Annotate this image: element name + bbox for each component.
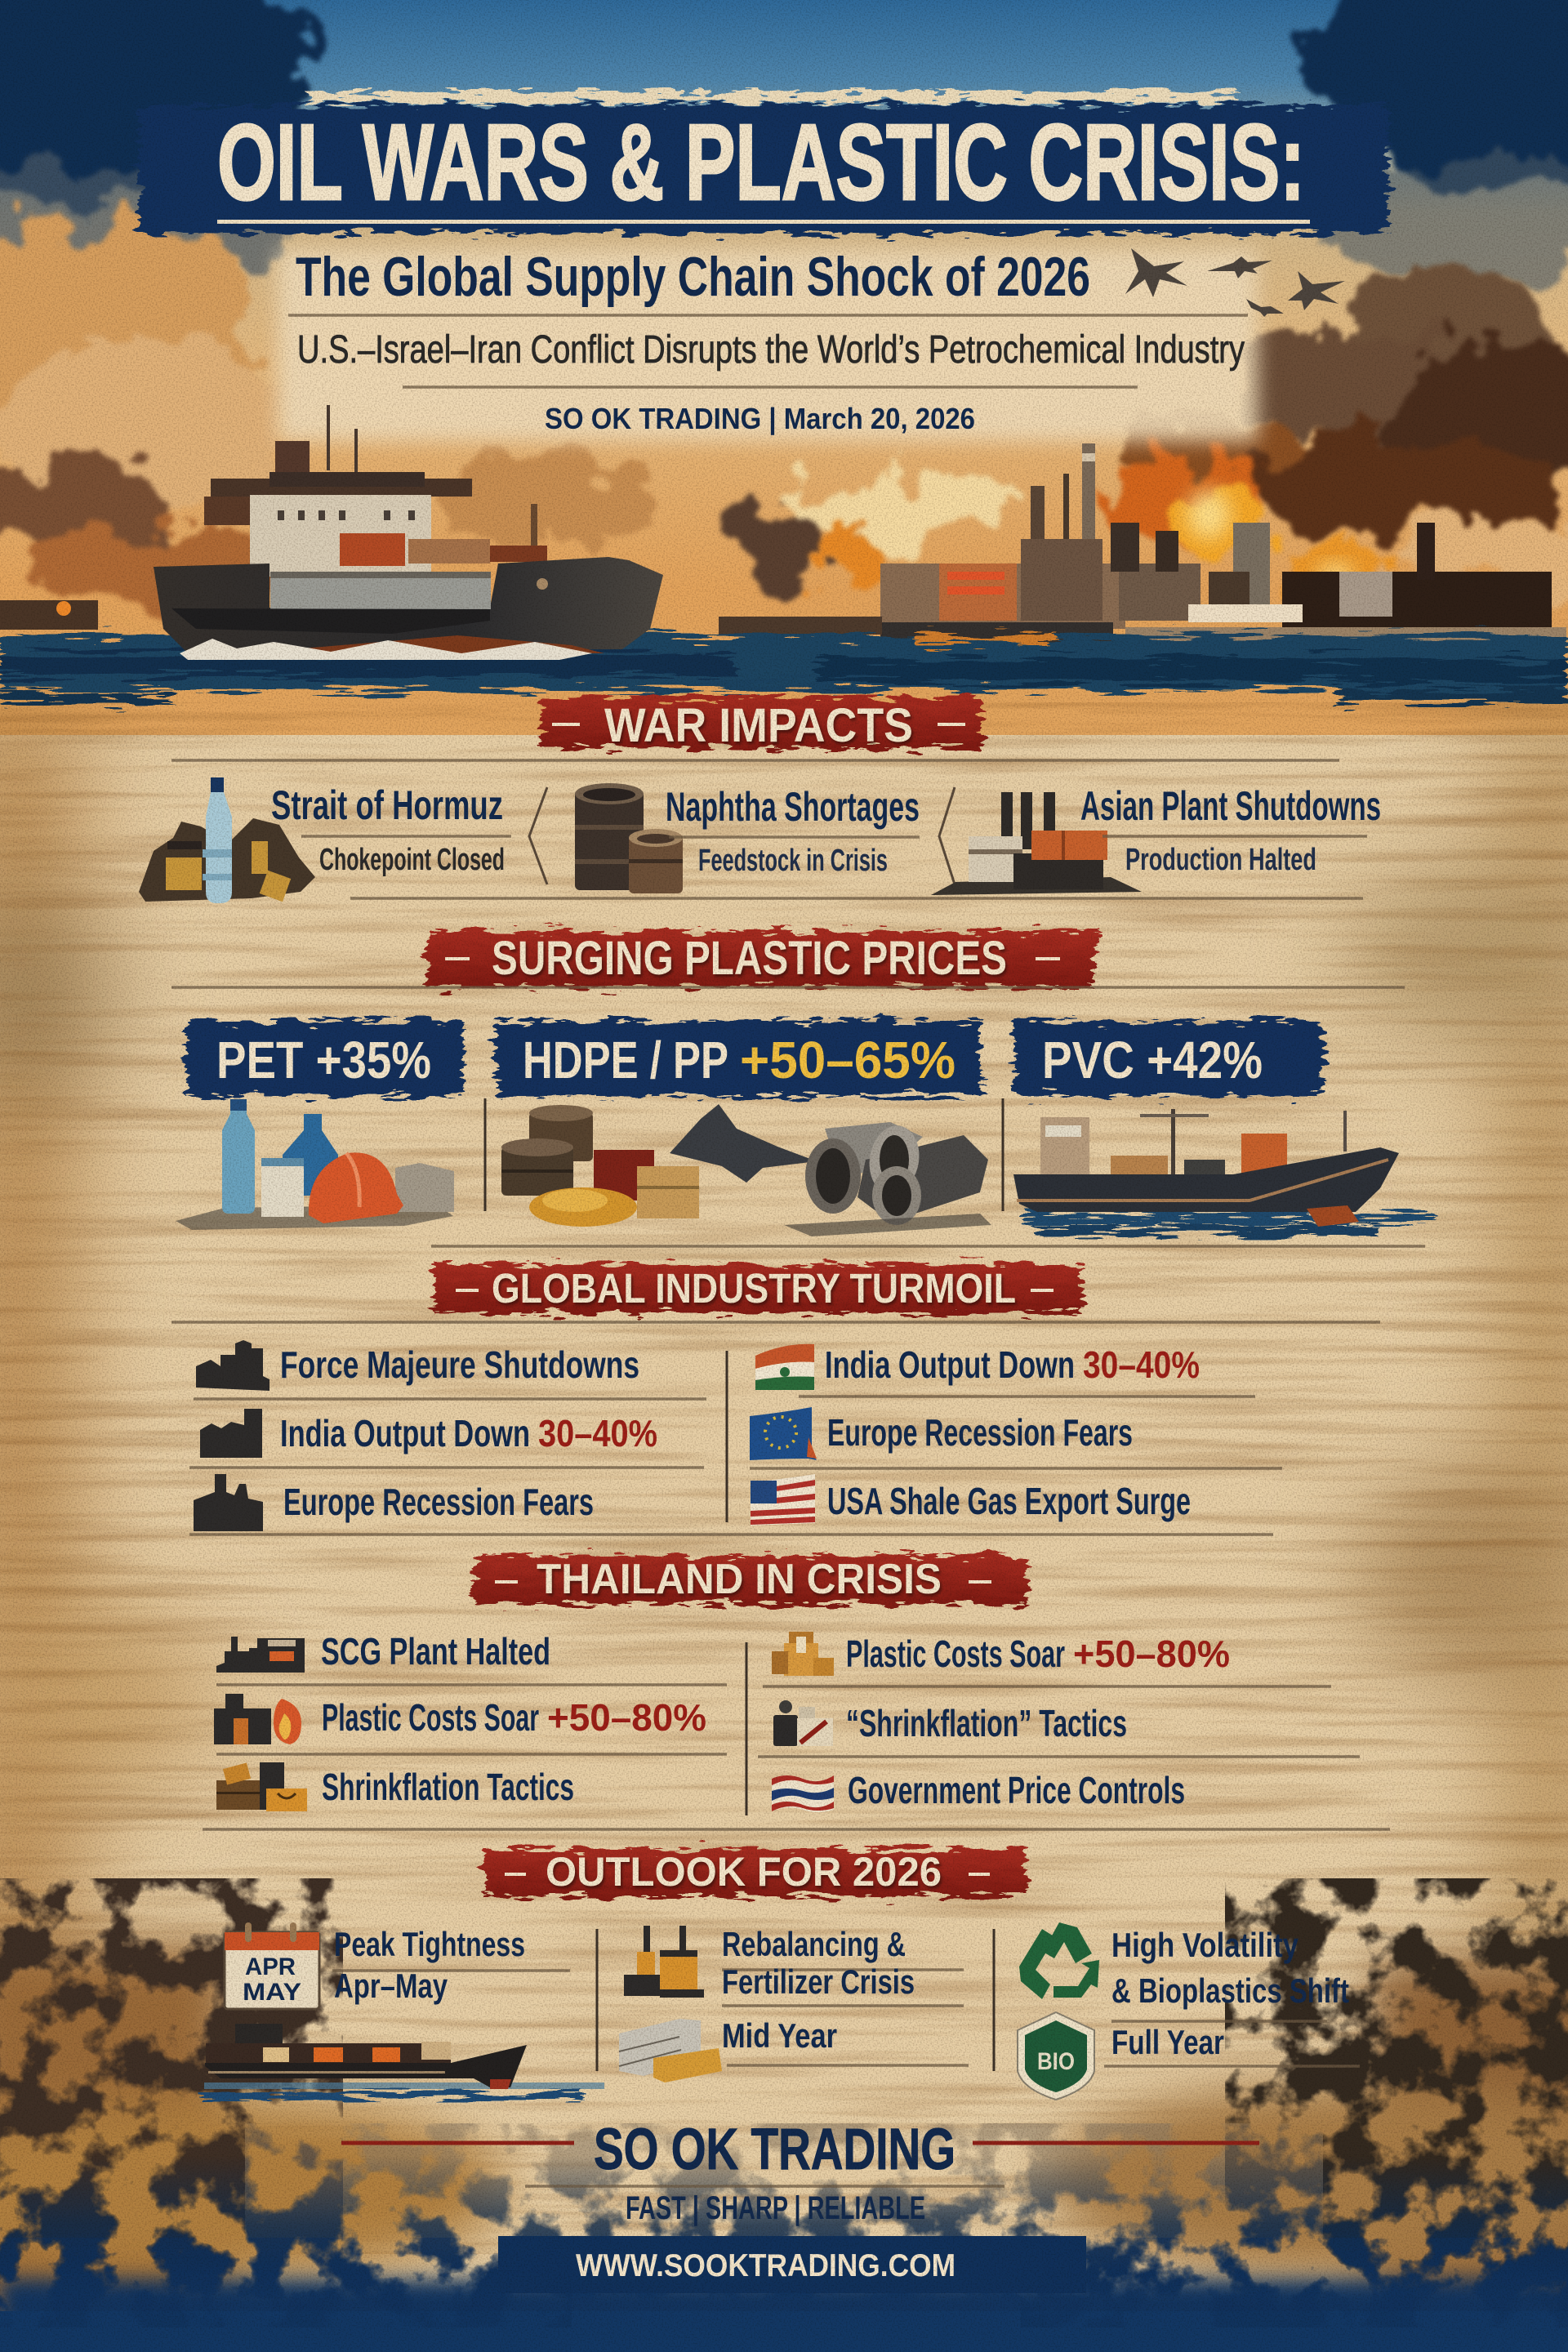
row: Government Price Controls: Government Price Controls	[848, 1769, 1185, 1811]
row: Force Majeure Shutdowns	[196, 1340, 639, 1391]
heading banner: global industry turmoil: GLOBAL INDUSTRY TURMOIL	[492, 1265, 1016, 1312]
heading banner: thailand in crisis	[176, 1555, 1380, 1604]
price panel: HDPE / PP: HDPE / PP	[523, 1031, 728, 1089]
item: Strait of Hormuz: Chokepoint Closed	[319, 843, 505, 877]
row: Europe Recession Fears: Europe Recession Fears	[283, 1481, 594, 1523]
icon: EU flag	[750, 1407, 817, 1460]
row: Plastic Costs Soar (left)	[214, 1694, 706, 1744]
row: Plastic Costs Soar (left): +50–80%	[547, 1696, 706, 1739]
icon: crates	[216, 1762, 307, 1811]
item: Naphtha Shortages: Feedstock in Crisis	[698, 844, 888, 878]
icon: bags and crate	[619, 2019, 722, 2082]
title clearing	[278, 249, 1258, 441]
row: Europe Recession Fears	[194, 1474, 594, 1531]
row: Plastic Costs Soar (right)	[772, 1632, 1230, 1676]
fighter jets	[1125, 248, 1345, 317]
section: thailand in crisis	[176, 1555, 1390, 1829]
row: Government Price Controls	[772, 1769, 1185, 1812]
icon: refinery	[200, 1409, 262, 1458]
row: Plastic Costs Soar (left): Plastic Costs Soar	[322, 1696, 539, 1739]
heading banner: thailand in crisis: THAILAND IN CRISIS	[537, 1556, 942, 1603]
title banner	[139, 91, 1388, 234]
row: Europe Recession Fears (EU flag): Europe Recession Fears	[827, 1411, 1133, 1454]
section: surging plastic prices	[172, 931, 1434, 1246]
icon: factory	[196, 1340, 270, 1391]
heading banner: outlook for 2026: OUTLOOK FOR 2026	[546, 1849, 942, 1895]
tanker ship	[154, 405, 663, 660]
row: Plastic Costs Soar (right): +50–80%	[1073, 1633, 1230, 1675]
column: High Volatility: Full Year	[1111, 2023, 1224, 2061]
icon: barrels	[575, 783, 683, 893]
row: India Output Down: India Output Down	[280, 1412, 530, 1454]
hero scene: burning tanker and refinery	[0, 220, 1568, 706]
icon: barrels, pellets and pipes	[501, 1104, 991, 1236]
icon: US flag	[751, 1474, 815, 1526]
row: India flag	[755, 1343, 1200, 1390]
icon: calendar: APR	[245, 1953, 296, 1980]
column: Peak Tightness: Apr–May	[334, 1967, 448, 2005]
icon: factory with fire	[214, 1694, 301, 1744]
slogan: FAST | SHARP | RELIABLE	[626, 2190, 925, 2226]
row: India Output Down: 30–40%	[538, 1412, 657, 1454]
footer: company sign-off	[341, 2118, 1259, 2283]
heading banner: surging plastic prices	[189, 931, 1336, 987]
row: Force Majeure Shutdowns: Force Majeure Shutdowns	[280, 1343, 639, 1386]
icon: calendar	[225, 1922, 319, 2009]
price panel: HDPE / PP	[495, 1021, 991, 1236]
price panel: PET: PET +35%	[216, 1031, 431, 1089]
rust bottom	[0, 1944, 1568, 2352]
row: SCG Plant Halted	[216, 1630, 550, 1673]
icon: calendar: MAY	[243, 1979, 301, 2006]
price panel: PVC	[1013, 1021, 1434, 1236]
section: outlook for 2026	[149, 1849, 1399, 2100]
refinery	[0, 443, 1566, 644]
icon: Thai flag	[772, 1775, 834, 1812]
icon: cargo ship	[1013, 1109, 1434, 1236]
item: Asian Plant Shutdowns: Production Halted	[1125, 843, 1316, 877]
icon: bottles and hard hat	[176, 1099, 454, 1230]
item: Strait of Hormuz: Strait of Hormuz	[271, 782, 503, 828]
icon: BIO shield: BIO	[1037, 2048, 1075, 2075]
date line: SO OK TRADING | March 20, 2026	[545, 402, 975, 436]
price panel: PET	[176, 1021, 464, 1230]
row: India flag: 30–40%	[1083, 1343, 1200, 1386]
heading banner: war impacts: WAR IMPACTS	[604, 699, 913, 752]
water	[0, 633, 1568, 706]
row: USA Shale Gas Export Surge	[751, 1474, 1191, 1526]
icon: BIO shield	[1018, 2012, 1094, 2100]
price panel: HDPE / PP: +50–65%	[740, 1031, 956, 1089]
icon: bottle and sacks	[139, 777, 315, 903]
icon: barge ship	[200, 2024, 604, 2100]
row: "Shrinkflation" Tactics	[773, 1700, 1127, 1746]
item: Naphtha Shortages	[575, 783, 920, 893]
icon: plant	[931, 792, 1142, 895]
website: WWW.SOOKTRADING.COM	[576, 2248, 956, 2283]
row: SCG Plant Halted: SCG Plant Halted	[321, 1630, 550, 1673]
heading banner: global industry turmoil	[180, 1264, 1385, 1313]
body edge stains	[0, 702, 1568, 2009]
column: Rebalancing: Mid Year	[722, 2016, 837, 2055]
column: Peak Tightness	[200, 1922, 604, 2100]
subtitle: The Global Supply Chain Shock of 2026	[296, 246, 1090, 308]
column: Rebalancing: Rebalancing &	[722, 1925, 906, 1963]
price panel: PVC: PVC +42%	[1042, 1031, 1263, 1089]
heading banner: surging plastic prices: SURGING PLASTIC PRICES	[492, 932, 1007, 985]
row: India flag: India Output Down	[825, 1343, 1075, 1386]
heading banner: war impacts	[234, 697, 1318, 752]
row: Shrinkflation Tactics	[216, 1762, 574, 1811]
column: High Volatility: High Volatility	[1111, 1926, 1299, 1964]
row: Plastic Costs Soar (right): Plastic Costs Soar	[846, 1633, 1065, 1675]
column: Rebalancing	[619, 1925, 969, 2082]
item: Asian Plant Shutdowns	[931, 783, 1381, 895]
icon: plant stacks	[194, 1474, 263, 1531]
item: Strait of Hormuz	[139, 777, 511, 903]
smoke and clouds	[0, 220, 1568, 617]
column: High Volatility	[1018, 1922, 1360, 2100]
tagline: U.S.–Israel–Iran Conflict Disrupts the World’s Petrochemical Industry	[297, 328, 1245, 372]
icon: halted plant	[216, 1637, 305, 1673]
icon: recycle arrows	[1019, 1922, 1099, 1999]
item: Asian Plant Shutdowns: Asian Plant Shutdowns	[1080, 783, 1381, 829]
heading banner: outlook for 2026	[149, 1849, 1399, 1896]
icon: boxes	[772, 1632, 834, 1676]
section: global industry turmoil	[172, 1264, 1385, 1535]
column: Rebalancing: Fertilizer Crisis	[722, 1962, 915, 2001]
row: Europe Recession Fears (EU flag)	[750, 1407, 1133, 1460]
row: USA Shale Gas Export Surge: USA Shale Gas Export Surge	[827, 1480, 1191, 1522]
company name: SO OK TRADING	[594, 2118, 956, 2182]
section: war impacts	[139, 697, 1381, 903]
icon: silos	[624, 1926, 704, 1998]
row: India Output Down	[200, 1409, 657, 1458]
column: High Volatility: & Bioplastics Shift	[1111, 1971, 1349, 2010]
row: Shrinkflation Tactics: Shrinkflation Tactics	[322, 1766, 574, 1808]
column: Peak Tightness: Peak Tightness	[334, 1925, 525, 1963]
item: Naphtha Shortages: Naphtha Shortages	[666, 784, 920, 830]
row: "Shrinkflation" Tactics: “Shrinkflation” Tactics	[846, 1702, 1127, 1744]
icon: India flag	[755, 1344, 814, 1390]
icon: shrunk packs	[773, 1700, 833, 1746]
